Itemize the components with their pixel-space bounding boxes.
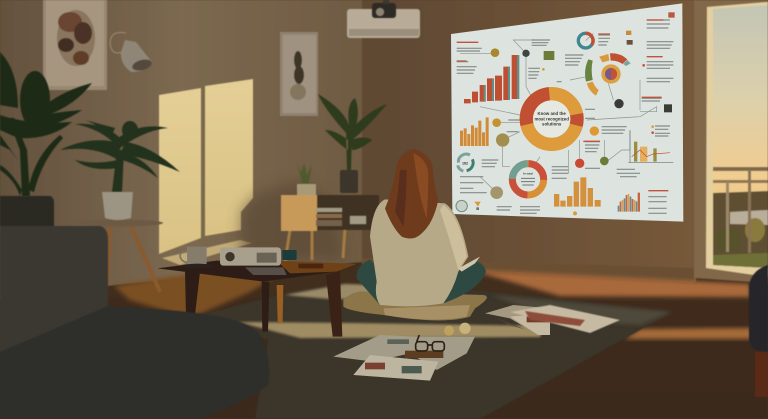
donut title: Know and the xyxy=(537,111,566,116)
small cup xyxy=(282,250,297,260)
bar chart: red xyxy=(464,55,519,103)
glasses xyxy=(416,335,444,351)
sofa back xyxy=(0,226,108,355)
magazines on rug xyxy=(333,305,550,381)
right armchair xyxy=(749,265,768,397)
floor cushion xyxy=(343,291,487,320)
top ring xyxy=(578,33,593,48)
framed art left xyxy=(43,0,107,90)
sunlight patch on wall xyxy=(159,79,253,265)
circular badges xyxy=(490,12,675,199)
wall lamp xyxy=(110,32,153,72)
distant trees xyxy=(713,191,768,268)
framed art right xyxy=(280,32,318,116)
body text lines xyxy=(457,20,673,213)
coffee table xyxy=(157,247,357,337)
right magazine xyxy=(485,305,550,335)
hair xyxy=(385,149,438,239)
far table leg xyxy=(277,285,283,323)
line and bar mini chart xyxy=(628,131,673,163)
right wall xyxy=(362,0,696,282)
bar chart: orange xyxy=(460,117,489,146)
multi-ring chart xyxy=(585,53,631,96)
shadow on wall xyxy=(241,180,345,262)
woman seated from behind xyxy=(343,149,487,320)
sofa seat xyxy=(0,306,269,419)
side table shadow cushion xyxy=(0,196,54,228)
sofa xyxy=(0,196,269,419)
projector on table xyxy=(220,247,281,266)
main donut chart xyxy=(526,94,577,144)
secondary donut chart: In total xyxy=(523,172,533,176)
round side table xyxy=(73,192,163,292)
floor light band right xyxy=(470,270,750,297)
rug xyxy=(195,283,672,419)
legs xyxy=(356,259,486,305)
projected infographic xyxy=(451,3,683,222)
accent headings xyxy=(457,20,668,191)
table legs xyxy=(185,272,200,315)
connector lines xyxy=(460,33,657,193)
grouped bar chart xyxy=(618,197,637,212)
shelf unit xyxy=(281,94,387,262)
teal cycle icon: 182 xyxy=(462,161,468,165)
right magazine edge xyxy=(510,305,620,333)
projection screen xyxy=(451,3,683,222)
railing xyxy=(713,167,768,171)
sweater xyxy=(370,199,468,306)
baseboard xyxy=(362,258,694,283)
crumpled papers xyxy=(444,326,454,336)
open magazine xyxy=(333,335,475,370)
teal cycle icon xyxy=(458,154,473,171)
left wall xyxy=(0,0,362,300)
secondary donut chart xyxy=(512,163,544,196)
tall plant and pot xyxy=(340,170,358,193)
table top xyxy=(157,261,357,282)
air conditioner xyxy=(347,9,420,38)
floor light band lower xyxy=(625,328,752,339)
books and remote xyxy=(298,264,323,268)
main donut chart: solutions xyxy=(542,121,562,126)
plant pot xyxy=(102,192,133,220)
orange column chart xyxy=(554,177,601,207)
window xyxy=(694,0,768,283)
main donut chart: most recognized xyxy=(534,116,569,121)
big plant left xyxy=(0,52,92,196)
medium plant on table xyxy=(60,120,180,192)
floor light band left xyxy=(114,268,290,318)
bottom icons xyxy=(456,200,577,215)
shelf plant xyxy=(297,163,312,186)
mug xyxy=(187,247,207,266)
sunlit rug band xyxy=(238,322,545,338)
ceiling projector xyxy=(372,0,396,18)
